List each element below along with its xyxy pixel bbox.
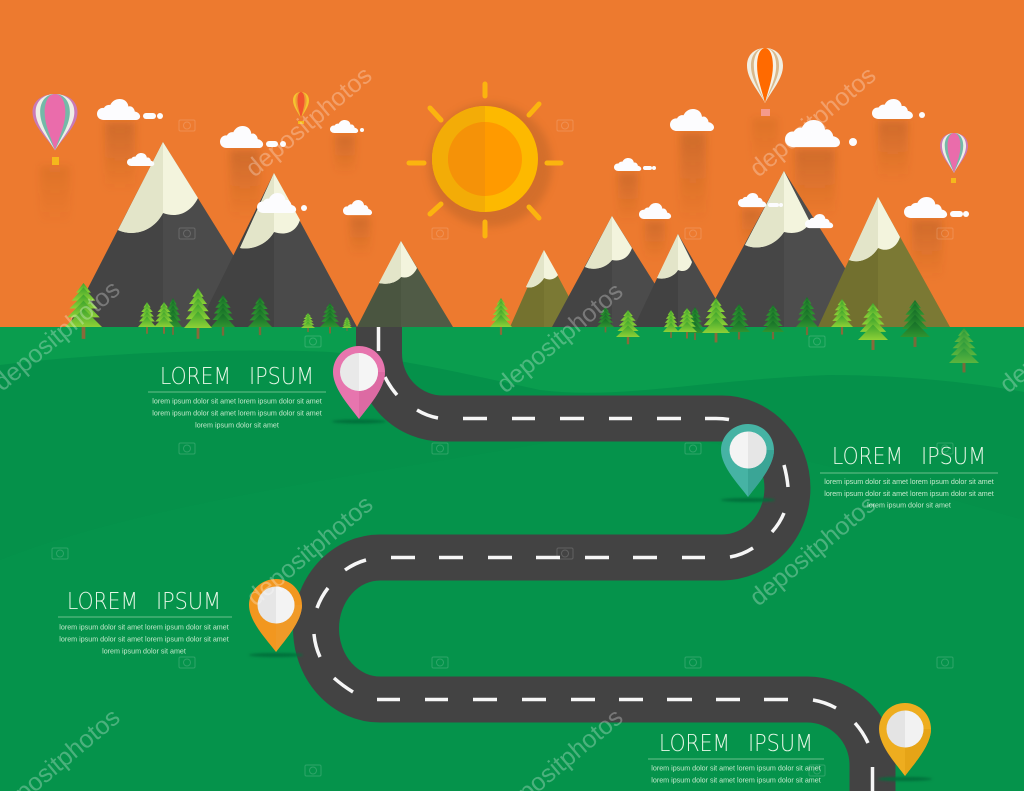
mountain 3 (357, 241, 453, 327)
text block 1 (148, 364, 326, 430)
text block 1: lorem ipsum dolor sit amet lorem ipsum dolor sit amet (152, 398, 322, 406)
sun rays (409, 84, 561, 236)
text block 3: lorem ipsum dolor sit amet lorem ipsum dolor sit amet (59, 624, 229, 632)
heading 2 (832, 444, 986, 470)
sun (409, 84, 561, 236)
mountains right (510, 171, 950, 327)
mountains left (68, 142, 453, 327)
watermark: depositphotos (744, 490, 881, 612)
text block 2: lorem ipsum dolor sit amet (867, 502, 951, 510)
heading 3 (67, 589, 221, 615)
mountain 6 (634, 234, 732, 327)
text block 3 (58, 589, 232, 656)
text block 2: lorem ipsum dolor sit amet lorem ipsum dolor sit amet (824, 490, 994, 498)
heading 3: IPSUM (156, 589, 221, 615)
watermark: depositphotos (240, 61, 377, 183)
hot air balloon pink large (32, 94, 78, 165)
text block 4 (648, 731, 824, 784)
road surface (316, 327, 872, 791)
text block 2: lorem ipsum dolor sit amet lorem ipsum dolor sit amet (824, 478, 994, 486)
sun glow shadow (428, 103, 552, 227)
clouds (97, 99, 969, 228)
heading 1: IPSUM (249, 364, 314, 390)
cloud trailing dots (143, 112, 969, 217)
road centre dashes (314, 327, 872, 791)
heading 1: LOREM (160, 364, 231, 390)
cloud shadows (40, 118, 942, 280)
hot air balloon small orange (293, 92, 309, 124)
text block 3: lorem ipsum dolor sit amet (102, 648, 186, 656)
hot air balloon orange large (747, 48, 783, 116)
watermark: depositphotos (241, 490, 378, 612)
text block 1: lorem ipsum dolor sit amet lorem ipsum dolor sit amet (152, 410, 322, 418)
lower grass hill (0, 436, 1024, 791)
winding road (314, 327, 872, 791)
text block 2 (820, 444, 998, 510)
mountain 1 (68, 142, 278, 327)
pin: orange (249, 579, 303, 657)
pin: teal (721, 424, 775, 502)
heading 4 (659, 731, 813, 757)
mountain 4 (510, 250, 585, 327)
mountain 5 (552, 216, 682, 327)
mountain 8 (818, 197, 950, 327)
trees (65, 283, 979, 372)
heading 3: LOREM (67, 589, 138, 615)
sun disc (432, 106, 538, 212)
text block 1: lorem ipsum dolor sit amet (195, 422, 279, 430)
mountain 2 (198, 173, 357, 327)
watermark: depositphotos (491, 277, 628, 399)
grass ground (0, 327, 1024, 791)
heading 4: LOREM (659, 731, 730, 757)
text block 3: lorem ipsum dolor sit amet lorem ipsum dolor sit amet (59, 636, 229, 644)
grass hills (0, 351, 1024, 791)
pin: pink (332, 346, 386, 424)
hot air balloon pink small (940, 133, 968, 183)
heading 2: LOREM (832, 444, 903, 470)
heading 2: IPSUM (921, 444, 986, 470)
text block 4: lorem ipsum dolor sit amet lorem ipsum dolor sit amet (651, 764, 821, 772)
heading 1 (160, 364, 314, 390)
heading 4: IPSUM (748, 731, 813, 757)
watermark: depositphotos (744, 61, 881, 183)
text block 4: lorem ipsum dolor sit amet lorem ipsum dolor sit amet (651, 776, 821, 784)
pin: yellow (878, 703, 932, 781)
mountain 7 (700, 171, 882, 327)
